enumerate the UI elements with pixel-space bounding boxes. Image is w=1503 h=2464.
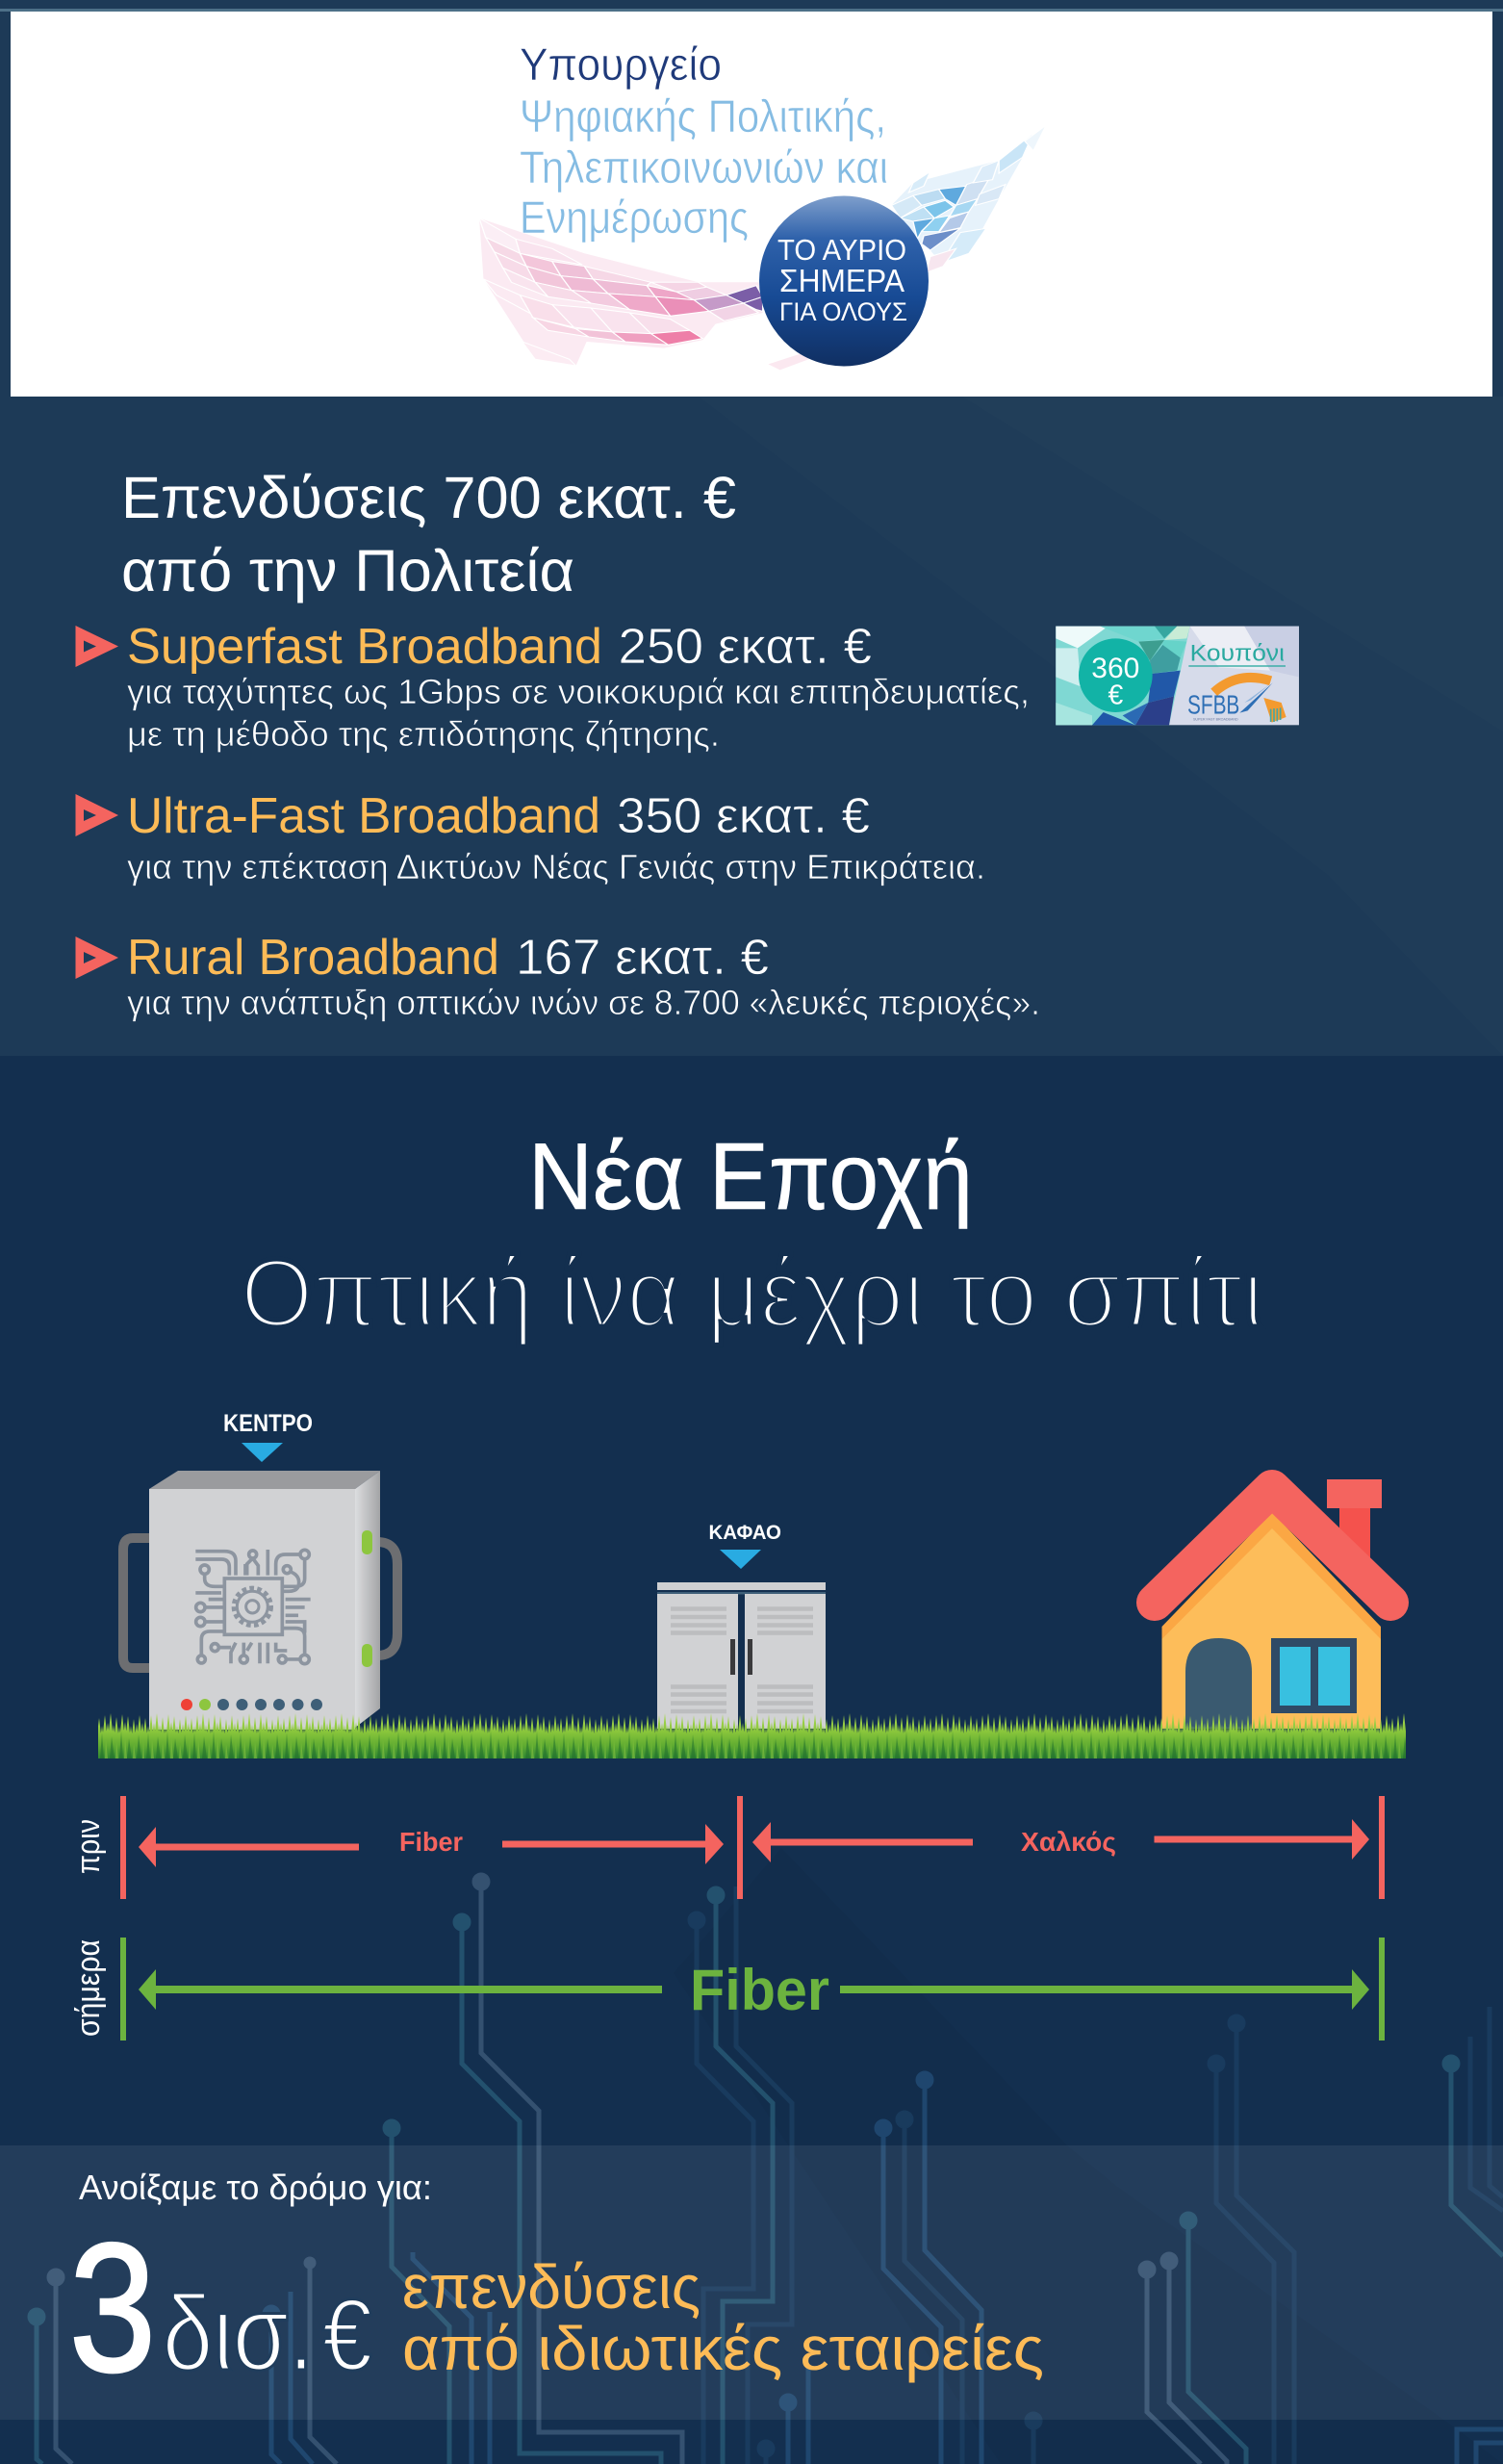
logo blue ribbon: [892, 125, 1046, 272]
number: 3 billion euro: 3: [69, 2206, 156, 2410]
item: Rural Broadband: για την ανάπτυξη οπτικών ινών σε 8.700 «λευκές περιοχές».: [127, 983, 1040, 1022]
text: from private companies: επενδύσεις: [402, 2252, 701, 2322]
arrow: fiber right: [502, 1824, 724, 1864]
number: 3 billion euro: €: [322, 2279, 372, 2392]
text: intro: Ανοίξαμε το δρόμο για:: [79, 2168, 432, 2207]
item: Ultra-Fast Broadband: για την επέκταση Δικτύων Νέας Γενιάς στην Επικράτεια.: [127, 847, 985, 886]
logo ministry name: [520, 38, 888, 243]
item: Superfast Broadband: για ταχύτητες ως 1Gbps σε νοικοκυριά και επιτηδευματίες,: [127, 672, 1030, 711]
circuit traces background: [28, 1873, 1503, 2464]
icon: street cabinet: [657, 1582, 826, 1729]
logo ministry name: Υπουργείο: [520, 38, 722, 90]
text: from private companies: [402, 2252, 1044, 2383]
coupon SFBB logo: [1187, 678, 1286, 723]
label: central office: [223, 1410, 313, 1462]
item: Rural Broadband: Rural Broadband: [127, 930, 499, 986]
label: fiber segment: Fiber: [399, 1827, 463, 1857]
arrow: copper right: [1155, 1819, 1369, 1860]
logo slogan badge: ΓΙΑ ΟΛΟΥΣ: [779, 297, 907, 326]
arrow: copper left: [752, 1822, 973, 1862]
logo slogan badge: [759, 196, 929, 366]
logo slogan badge: ΤΟ ΑΥΡΙΟ: [777, 233, 906, 267]
green connectors: [362, 1530, 372, 1667]
icon: central office server box: [123, 1471, 397, 1730]
house door: [1185, 1638, 1252, 1729]
number: 3 billion euro: δισ.: [163, 2274, 314, 2393]
icon: bullet triangle: [75, 794, 118, 836]
heading: investment total: από την Πολιτεία: [121, 538, 574, 603]
arrow: fiber left: [139, 1827, 359, 1867]
label: before: πριν: [70, 1819, 107, 1874]
coupon amount badge: 360: [1091, 653, 1139, 684]
panel: private investment band: [0, 2145, 1503, 2420]
grass strip: [98, 1713, 1406, 1758]
title: new era: Νέα Εποχή: [528, 1123, 973, 1229]
heading: investment total: [121, 465, 736, 603]
item: Rural Broadband: [75, 930, 1040, 1022]
number: 3 billion euro: [69, 2206, 372, 2410]
icon: chip with gear: [195, 1550, 311, 1664]
status lights: [181, 1699, 322, 1710]
title: new era: [241, 1123, 1263, 1348]
coupon SFBB logo: SFBB: [1187, 690, 1239, 720]
label: central office: ΚΕΝΤΡΟ: [223, 1410, 313, 1437]
item: Superfast Broadband: με τη μέθοδο της επιδότησης ζήτησης.: [127, 714, 720, 754]
item: Ultra-Fast Broadband: [75, 788, 985, 886]
icon: bullet triangle: [75, 937, 118, 979]
coupon amount badge: [1079, 638, 1153, 712]
logo ministry name: Ψηφιακής Πολιτικής,: [520, 90, 886, 141]
icon: house: [1155, 1479, 1390, 1729]
label: copper segment: Χαλκός: [1021, 1827, 1116, 1857]
item: Superfast Broadband: 250 εκατ. €: [618, 619, 872, 675]
logo slogan badge: ΣΗΜΕΡΑ: [779, 263, 904, 298]
item: Rural Broadband: 167 εκατ. €: [516, 930, 769, 986]
icon: bullet triangle: [75, 626, 118, 667]
label: today: σήμερα: [70, 1939, 107, 2037]
label: street cabinet: ΚΑΦΑΟ: [708, 1522, 781, 1544]
heading: investment total: Επενδύσεις 700 εκατ. €: [121, 465, 736, 530]
item: Ultra-Fast Broadband: 350 εκατ. €: [617, 788, 870, 844]
panel: ministry logo header: [11, 12, 1492, 397]
arrow: fiber right long: [840, 1969, 1369, 2010]
label: street cabinet: [708, 1522, 781, 1569]
coupon: 360 euro voucher: [1056, 627, 1299, 725]
item: Ultra-Fast Broadband: Ultra-Fast Broadband: [127, 788, 600, 844]
arrow: fiber left long: [139, 1969, 662, 2010]
logo ministry name: Τηλεπικοινωνιών και: [520, 141, 888, 192]
item: Superfast Broadband: Superfast Broadband: [127, 619, 602, 675]
coupon amount badge: €: [1108, 680, 1123, 711]
house window: [1271, 1638, 1357, 1713]
coupon: 360 euro voucher: Κουπόνι: [1190, 641, 1285, 667]
logo pink ribbon: [479, 218, 810, 371]
item: Superfast Broadband: [75, 619, 1030, 754]
coupon SFBB logo: SUPER FAST BROADBAND: [1193, 718, 1238, 722]
text: from private companies: από ιδιωτικές εταιρείες: [402, 2314, 1044, 2383]
logo ministry name: Ενημέρωσης: [520, 192, 749, 243]
diagram: today, fiber all the way: [120, 1938, 1385, 2040]
diagram: before, fiber then copper: [120, 1796, 1385, 1899]
title: new era: Οπτική ίνα μέχρι το σπίτι: [241, 1240, 1263, 1348]
label: fiber full length: Fiber: [690, 1958, 829, 2022]
